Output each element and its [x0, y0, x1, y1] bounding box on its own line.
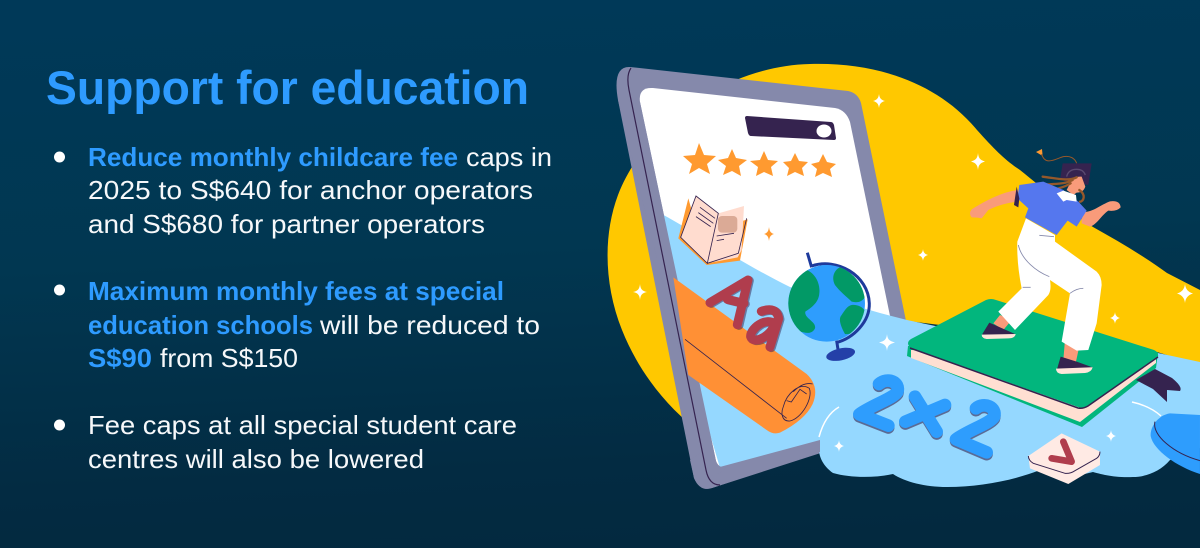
- answer tile: [1028, 433, 1100, 484]
- letters Aa: [710, 280, 780, 348]
- back cover: [907, 346, 1158, 427]
- green book platform: [907, 299, 1158, 427]
- bullet 3: special student care centres: Fee caps at all special student care: [88, 410, 517, 440]
- hair: [1043, 177, 1084, 202]
- bullet 2: special education school fees: from S$150: [160, 343, 298, 373]
- bullet 2: special education school fees: S$90: [88, 343, 152, 373]
- bookmark ribbon: [1136, 369, 1181, 402]
- bullet 1: childcare fee caps: [54, 142, 552, 239]
- bullet 3: special student care centres: [54, 410, 517, 474]
- bullet 1: childcare fee caps: and S$680 for partner operators: [88, 209, 485, 239]
- back arm: [970, 190, 1018, 218]
- tablet lower edge over ground: [690, 440, 820, 489]
- five star rating: [683, 143, 836, 177]
- light blue ground: [660, 213, 1200, 487]
- tablet screen: [640, 88, 896, 467]
- bullet 2: special education school fees: Maximum monthly fees at special: [88, 276, 504, 306]
- title: Support for education: [46, 61, 529, 114]
- bullet 1: childcare fee caps: 2025 to S$640 for anchor operators: [88, 175, 533, 205]
- illustration: [608, 64, 1200, 489]
- tablet edge line: [628, 68, 720, 485]
- person running on book: [970, 149, 1121, 374]
- collar: [1057, 191, 1077, 202]
- tablet speaker bar: [745, 116, 836, 140]
- white sparkles: [633, 94, 1193, 452]
- top cover: [908, 299, 1158, 408]
- tablet left side over ground: [618, 100, 727, 476]
- bullet 2: special education school fees: will be reduced to: [319, 310, 540, 340]
- open book icon: [678, 196, 748, 265]
- front shoe: [1056, 357, 1093, 374]
- bullet 1: childcare fee caps: Reduce monthly childcare fee: [88, 142, 458, 172]
- trouser creases: [1018, 235, 1083, 293]
- bullet 2: special education school fees: [54, 276, 540, 373]
- yellow blob: [608, 64, 1200, 432]
- pages: [911, 350, 1156, 422]
- bullet list: [54, 142, 552, 474]
- blue disc: [1151, 413, 1200, 474]
- white trousers: [998, 218, 1102, 351]
- face: [1067, 177, 1085, 195]
- bullet 1: childcare fee caps: caps in: [466, 142, 552, 172]
- graduation cap: [1060, 163, 1092, 185]
- tassel: [1036, 149, 1077, 163]
- small orange sparkle: [764, 227, 774, 241]
- cover edge line: [910, 348, 1158, 408]
- forward arm: [1082, 201, 1121, 227]
- number blocks 2x2: [859, 381, 995, 454]
- tablet frame: [616, 67, 911, 489]
- bullet 2: special education school fees: education schools: [88, 310, 313, 340]
- white cloud arcs: [819, 402, 1161, 437]
- globe icon: [780, 253, 869, 363]
- bullet 3: special student care centres: centres will also be lowered: [88, 444, 424, 474]
- shirt: [1017, 182, 1087, 235]
- rolled orange paper: [673, 277, 815, 433]
- skin legs: [993, 315, 1080, 362]
- back shoe: [982, 323, 1016, 339]
